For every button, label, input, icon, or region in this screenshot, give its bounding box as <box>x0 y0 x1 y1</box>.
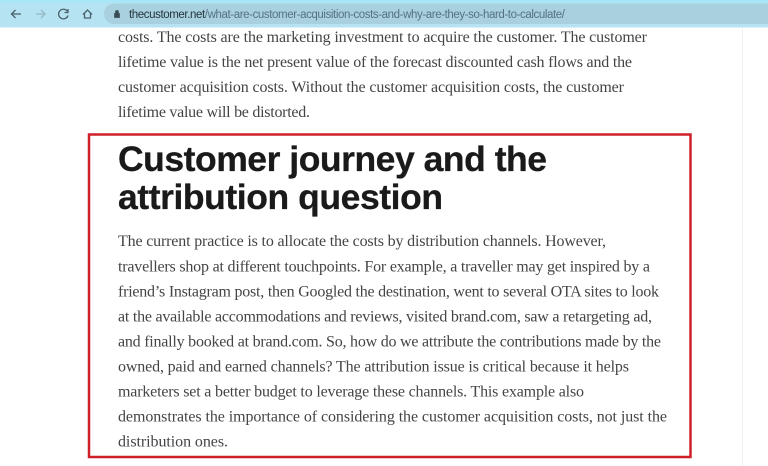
icon: forward arrow <box>36 10 45 18</box>
icon: back arrow <box>12 10 21 18</box>
heading: attribution question <box>118 177 443 217</box>
text block: intro paragraph: lifetime value will be distorted. <box>118 104 310 121</box>
text block: attribution paragraph: owned, paid and earned channels? The attribution issue is critical because it helps <box>118 359 629 376</box>
text block: intro paragraph: customer acquisition costs. Without the customer acquisition costs, the customer <box>118 79 625 96</box>
text block: attribution paragraph: marketers set a better budget to leverage these channels. This example also <box>118 384 584 401</box>
text block: attribution paragraph: at the available accommodations and reviews, visited brand.com, saw a retargeting ad, <box>118 308 652 326</box>
text block: attribution paragraph <box>118 233 667 451</box>
text block: attribution paragraph: friend’s Instagram post, then Googled the destination, went to several OTA sites to look <box>118 284 659 300</box>
address bar <box>104 4 768 24</box>
text block: attribution paragraph: The current practice is to allocate the costs by distribution channels. However, <box>118 233 606 250</box>
url text: thecustomer.net/what-are-customer-acquisition-costs-and-why-are-they-so-hard-to-calculate/ <box>129 9 566 21</box>
icon: lock <box>114 10 120 18</box>
red highlight box <box>89 134 690 457</box>
sidebar divider line <box>742 28 743 466</box>
icon: reload <box>59 9 68 19</box>
heading <box>118 139 547 217</box>
icon: home <box>83 10 92 18</box>
heading: Customer journey and the <box>118 139 547 179</box>
text block: attribution paragraph: travellers shop at different touchpoints. For example, a traveller may get inspired by a <box>118 258 650 276</box>
text block: attribution paragraph: and finally booked at brand.com. So, how do we attribute the contributions made by the <box>118 334 661 351</box>
text block: intro paragraph <box>118 29 648 121</box>
browser toolbar <box>0 0 768 28</box>
text block: intro paragraph: lifetime value is the net present value of the forecast discounted cash flows and the <box>118 54 632 71</box>
text block: attribution paragraph: distribution ones. <box>118 434 228 451</box>
text block: intro paragraph: costs. The costs are the marketing investment to acquire the customer. The customer <box>118 29 648 46</box>
text block: attribution paragraph: demonstrates the importance of considering the customer acquisition costs, not just the <box>118 409 667 426</box>
